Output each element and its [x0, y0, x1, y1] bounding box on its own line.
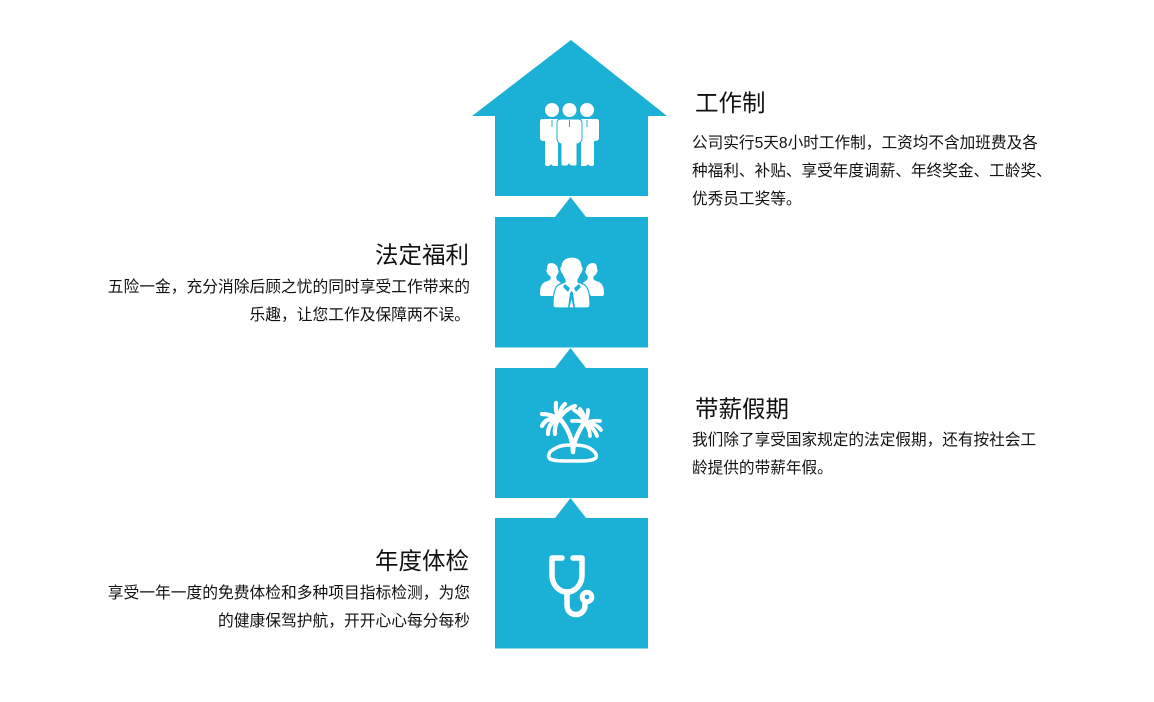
text: statutory benefits: 五险一金，充分消除后顾之忧的同时享受工作带来的: [108, 279, 470, 296]
text: paid leave: [692, 431, 1036, 476]
heading: statutory benefits: 法定福利: [375, 242, 469, 268]
block: benefits: [495, 197, 648, 348]
text: statutory benefits: 乐趣，让您工作及保障两不误。: [250, 307, 470, 324]
icon: stethoscope: [552, 558, 592, 614]
text: work system: 公司实行5天8小时工作制，工资均不含加班费及各: [692, 134, 1038, 152]
text: annual checkup: 享受一年一度的免费体检和多种项目指标检测，为您: [108, 585, 470, 602]
text: work system: 种福利、补贴、享受年度调薪、年终奖金、工龄奖、: [692, 162, 1052, 180]
text: paid leave: 我们除了享受国家规定的法定假期，还有按社会工: [692, 432, 1036, 448]
text: paid leave: 龄提供的带薪年假。: [692, 460, 833, 476]
heading: paid leave: 带薪假期: [695, 396, 789, 422]
text: statutory benefits: [108, 278, 470, 324]
block: house top: [472, 40, 667, 196]
block: health check: [495, 498, 648, 648]
icon: palm island: [542, 403, 601, 461]
text: work system: [692, 134, 1052, 208]
text: work system: 优秀员工奖等。: [692, 190, 802, 208]
heading: work system: 工作制: [695, 90, 766, 116]
icon: three staff: [540, 103, 599, 166]
text: annual checkup: [108, 584, 470, 630]
block: holidays: [495, 348, 648, 498]
text: annual checkup: 的健康保驾护航，开开心心每分每秒: [218, 613, 470, 630]
icon: business team: [540, 257, 604, 308]
heading: annual checkup: 年度体检: [375, 548, 469, 574]
